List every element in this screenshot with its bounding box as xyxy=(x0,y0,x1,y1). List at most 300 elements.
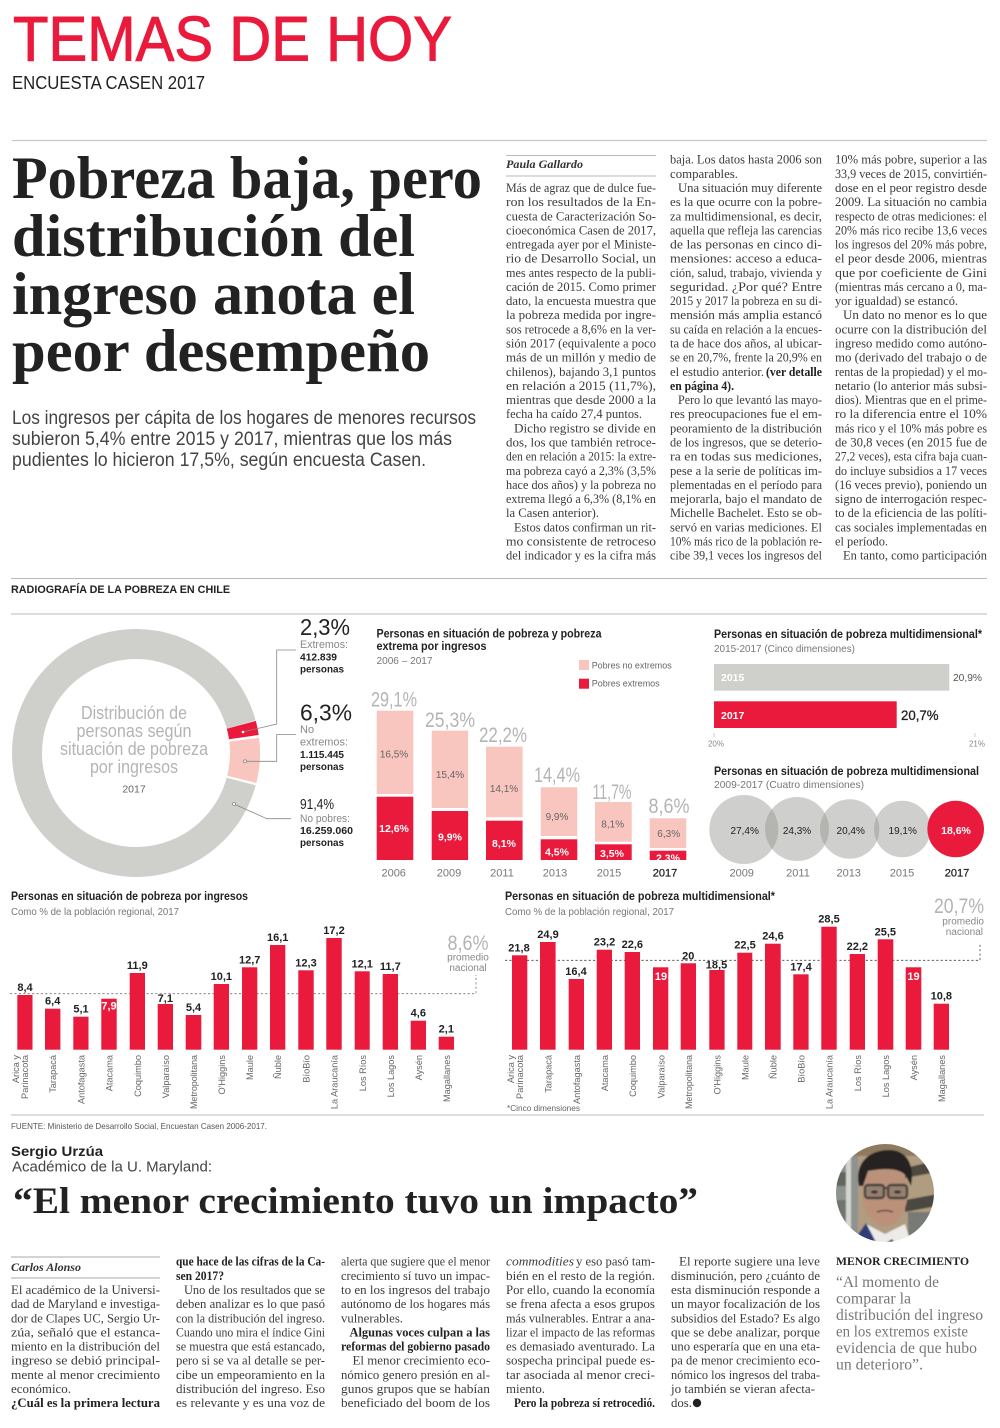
deck text xyxy=(12,408,476,471)
interview column 4: commodities xyxy=(506,1254,574,1269)
bar chart: regional income poverty: 12,7 xyxy=(239,954,260,966)
interview column 3: reformas del gobierno pasado xyxy=(341,1339,490,1354)
bubble chart 2009-2017: 2017 xyxy=(945,868,969,880)
callout: not poor: 91,4% xyxy=(300,797,334,813)
pull quote: en los extremos existe xyxy=(836,1324,968,1340)
headline: Pobreza baja, pero xyxy=(12,145,482,211)
bar 2006: 29,1% xyxy=(371,689,417,712)
bar 2011: 8,1% xyxy=(492,838,517,850)
bar chart: regional income poverty: Tarapacá xyxy=(48,1054,58,1093)
pull quote: comparar la xyxy=(836,1290,911,1308)
article column 3: que por coeficiente de Gini xyxy=(835,265,987,280)
interview column 3 xyxy=(341,1254,491,1410)
interview column 4: miento. xyxy=(506,1381,545,1396)
bar chart: regional multidimensional poverty: O'Higgins xyxy=(712,1055,722,1095)
section title: TEMAS DE HOY xyxy=(13,4,452,74)
bar chart: regional income poverty: Parinacota xyxy=(20,1054,30,1099)
bar 2017: 2017 xyxy=(653,868,677,880)
article column 3: dios). Mientras que en el prime- xyxy=(835,392,987,407)
article column 2: plementadas en el período para xyxy=(670,477,822,492)
bar 2013: 14,4% xyxy=(534,764,580,787)
interview column 1: ingreso se debió principal- xyxy=(11,1353,160,1368)
bar 2006: 2006 xyxy=(381,868,406,880)
article column 3: más rico y el 10% más pobre es xyxy=(835,420,987,435)
interview column 5: nómico los ingresos del traba- xyxy=(671,1367,820,1382)
bar 2006 xyxy=(371,689,417,880)
multidimensional poverty bars heading: Personas en situación de pobreza multidimensional* xyxy=(714,629,982,641)
national average label: income: promedio xyxy=(447,952,489,964)
article column 3: (mientras más cercano a 0, ma- xyxy=(835,279,987,294)
bar chart: regional income poverty: BíoBío xyxy=(302,1055,312,1083)
bubble chart 2009-2017: 2011 xyxy=(786,868,810,880)
article column 2: 2015 y 2017 la pobreza en su di- xyxy=(670,293,822,308)
callout: extreme poverty: Extremos: xyxy=(300,639,348,651)
interview column 1: dad de Maryland e investiga- xyxy=(11,1296,160,1311)
interview column 4: bién en el resto de la región. xyxy=(506,1268,655,1283)
interview column 1: mente al menor crecimiento xyxy=(11,1367,160,1382)
bar chart: regional income poverty: Magallanes xyxy=(442,1055,452,1102)
interview column 3: gunos grupos que se habían xyxy=(341,1381,491,1396)
interview column 1: El académico de la Universi- xyxy=(11,1282,160,1297)
article column 3: ocurre con la distribución del xyxy=(835,321,987,336)
interview column 2: es relevante y es una voz de xyxy=(176,1395,325,1410)
interview column 1: miento en la distribución del xyxy=(11,1339,160,1354)
article column 2: 10% más rico de la población re- xyxy=(670,534,822,548)
interview column 5: un mayor focalización de los xyxy=(671,1296,820,1311)
bubble chart 2009-2017: 24,3% xyxy=(783,826,811,837)
interview column 2 xyxy=(176,1254,325,1410)
bar 2017 xyxy=(645,795,691,880)
article column 3: dose en el peor registro desde xyxy=(835,180,987,195)
bar 2009 xyxy=(425,709,475,880)
byline: Paula Gallardo: Paula Gallardo xyxy=(506,159,583,171)
article column 1: sión 2017 (equivalente a poco xyxy=(506,336,656,350)
interview column 1: zúa, señaló que el estanca- xyxy=(11,1324,160,1339)
interview column 3: El menor crecimiento eco- xyxy=(352,1353,490,1368)
article column 1: extrema llegó a 6,3% (8,1% en xyxy=(506,491,656,506)
interview column 2: sen 2017? xyxy=(176,1268,224,1283)
article column 3: to de la eficiencia de las políti- xyxy=(835,505,987,520)
bar 2009: 2009 xyxy=(437,868,461,880)
bar chart: regional multidimensional poverty: 10,8 xyxy=(931,991,952,1003)
article column 3: En tanto, como participación xyxy=(843,548,987,563)
article column 1: ron los resultados de la En- xyxy=(506,194,656,209)
article column 1: Dicho registro se divide en xyxy=(514,420,657,435)
callout: extreme poverty: personas xyxy=(300,664,344,676)
bar chart: regional multidimensional poverty: Tarapacá xyxy=(544,1054,554,1093)
article column 2: aquella que refleja las carencias xyxy=(670,222,822,237)
deck text: subieron 5,4% entre 2015 y 2017, mientras que los más xyxy=(12,429,452,450)
article column 3: los ingresos del 20% más pobre, xyxy=(835,237,987,252)
bar chart: regional multidimensional poverty: Parinacota xyxy=(515,1054,525,1099)
bubble chart 2009-2017: 20,4% xyxy=(837,826,865,837)
bar chart: regional multidimensional poverty: 20 xyxy=(682,950,694,962)
interview column 5 xyxy=(670,1254,820,1410)
bar chart: regional income poverty: Arica y xyxy=(11,1055,21,1083)
bar chart: regional income poverty: 7,9 xyxy=(101,1000,117,1012)
interview column 1: económico. xyxy=(11,1381,71,1396)
stacked chart heading: extrema por ingresos xyxy=(376,641,486,653)
bar chart: regional multidimensional poverty: Atacama xyxy=(600,1054,610,1091)
article column 1: entregada ayer por el Ministe- xyxy=(506,237,656,252)
interview column 2: con la distribución del ingreso. xyxy=(176,1310,325,1325)
article column 2: servó en varias mediciones. El xyxy=(670,519,822,534)
donut centre label: Distribución de xyxy=(81,703,187,723)
article column 3: do incluye subsidios a 17 veces xyxy=(835,463,987,478)
stacked chart heading: 2006 – 2017 xyxy=(376,655,433,667)
article column 2: Michelle Bachelet. Esto se ob- xyxy=(670,505,822,520)
article column 1: den en relación a 2015: la extre- xyxy=(506,449,656,464)
deck text: pudientes lo hicieron 17,5%, según encuesta Casen. xyxy=(12,450,426,471)
article column 2: ra en todas sus mediciones, xyxy=(670,449,822,464)
bar chart: regional multidimensional poverty: BíoBío xyxy=(796,1055,806,1083)
infographic section heading: RADIOGRAFÍA DE LA POBREZA EN CHILE xyxy=(11,583,230,596)
bar chart: regional income poverty: Aysén xyxy=(414,1055,424,1080)
bar chart: regional income poverty: 12,1 xyxy=(351,958,373,970)
bar chart: regional multidimensional poverty: 24,6 xyxy=(762,931,784,943)
bar 2013: 2013 xyxy=(543,868,567,880)
article column 3: mo (derivado del trabajo o de xyxy=(835,350,987,365)
interview header: Académico de la U. Maryland: xyxy=(12,1160,212,1176)
interview column 4: Por ello, cuando la economía xyxy=(506,1282,655,1297)
interview column 5: jo también se vieran afecta- xyxy=(670,1381,815,1396)
bar chart: regional multidimensional poverty: Los Ríos xyxy=(853,1055,863,1091)
interview column 3: nómico genero presión en al- xyxy=(341,1367,490,1382)
four-dimension heading: Personas en situación de pobreza multidimensional xyxy=(714,766,979,778)
bar chart: regional multidimensional poverty: 22,6 xyxy=(622,939,643,951)
article column 1: chilenos), bajando 3,1 puntos xyxy=(506,364,656,379)
portrait photo xyxy=(836,1144,934,1242)
bar chart: regional income poverty: 17,2 xyxy=(323,925,345,937)
bar chart: regional income poverty: Valparaíso xyxy=(161,1055,171,1098)
article column 1: rio de Desarrollo Social, un xyxy=(506,251,657,266)
source note: FUENTE: Ministerio de Desarrollo Social, Encuestan Casen 2006-2017. xyxy=(11,1121,267,1131)
bar 2013: 9,9% xyxy=(546,812,569,823)
article column 1: hace dos años) y la pobreza no xyxy=(506,477,656,492)
regional multidimensional poverty heading xyxy=(505,891,775,918)
bar 2015 xyxy=(592,781,632,880)
interview column 5: pa de menor crecimiento eco- xyxy=(671,1353,820,1368)
article column 3: rentas de la propiedad) y el mo- xyxy=(835,364,987,379)
bar chart: regional income poverty: 11,7 xyxy=(380,961,401,973)
bar chart: regional income poverty: 4,6 xyxy=(411,1008,426,1020)
bar chart: regional multidimensional poverty: Antofagasta xyxy=(572,1054,582,1104)
bar chart: regional multidimensional poverty: 17,4 xyxy=(790,961,813,973)
regional multidimensional poverty heading: Como % de la población regional, 2017 xyxy=(505,906,674,918)
pull quote xyxy=(836,1256,983,1374)
interview column 5: que se debe analizar, porque xyxy=(671,1324,820,1339)
multidimensional poverty bars heading: 2015-2017 (Cinco dimensiones) xyxy=(714,643,855,655)
bar chart: regional multidimensional poverty: Aysén xyxy=(909,1055,919,1080)
callout: not poor: personas xyxy=(300,837,344,849)
bar 2015: 11,7% xyxy=(592,781,632,804)
horizontal bar chart 2015-2017 xyxy=(708,664,985,749)
article column 3: yor igualdad) se estancó. xyxy=(835,293,958,308)
interview column 2: que hace de las cifras de la Ca- xyxy=(176,1254,325,1269)
article column 2: se en 20,7%, frente la 20,9% en xyxy=(670,350,822,365)
interview column 3: to en los ingresos del trabajo xyxy=(341,1282,490,1297)
article column 1: Más de agraz que de dulce fue- xyxy=(506,180,656,195)
interview column 4: Pero la pobreza sí retrocedió. xyxy=(514,1395,655,1410)
bar chart: regional income poverty: 2,1 xyxy=(439,1024,454,1036)
article column 2: el estudio anterior. xyxy=(670,364,764,379)
callout: extreme poverty: 412.839 xyxy=(300,652,337,664)
interview header xyxy=(11,1143,212,1176)
bar chart: regional multidimensional poverty: Los Lagos xyxy=(881,1055,891,1097)
byline: Carlos Alonso: Carlos Alonso xyxy=(11,1262,81,1274)
article column 3: de 30,8 veces (en 2015 fue de xyxy=(835,434,987,450)
interview column 2: Uno de los resultados que se xyxy=(184,1282,325,1297)
interview column 2: distribución del ingreso. Eso xyxy=(176,1381,325,1396)
stacked chart legend xyxy=(579,660,672,690)
interview column 4: sospecha principal puede es- xyxy=(506,1353,655,1368)
bar chart: regional income poverty: La Araucanía xyxy=(330,1054,340,1109)
bar chart: regional income poverty: Maule xyxy=(245,1055,255,1080)
bar chart: regional income poverty: 12,3 xyxy=(295,957,317,969)
article column 1: Estos datos confirman un rit- xyxy=(514,519,656,534)
interview column 2: pero si se va al detalle se per- xyxy=(176,1353,325,1368)
article column 1 xyxy=(506,180,657,563)
bar chart: regional multidimensional poverty: 25,5 xyxy=(875,926,896,938)
donut chart: distribution of poverty xyxy=(27,644,266,862)
interview column 5: esta disminución responde a xyxy=(671,1282,820,1297)
bar chart: regional income poverty: 11,9 xyxy=(127,960,148,972)
article column 3: 20% más rico recibe 13,6 veces xyxy=(835,222,987,237)
bar chart: regional multidimensional poverty xyxy=(505,914,980,1109)
bar chart: regional income poverty: Antofagasta xyxy=(76,1054,86,1104)
article column 1: mientras que desde 2000 a la xyxy=(506,392,656,407)
article column 3: cas sociales implementadas en xyxy=(835,519,987,534)
interview column 3: beneficiado del boom de los xyxy=(341,1395,490,1410)
bar chart: regional income poverty: 16,1 xyxy=(267,932,288,944)
bar 2011 xyxy=(479,724,527,880)
article column 1: la Casen anterior). xyxy=(506,505,599,520)
callout: non-extreme poverty: personas xyxy=(300,761,344,773)
bar chart: regional income poverty: Metropolitana xyxy=(189,1054,199,1109)
regional income poverty heading: Personas en situación de pobreza por ingresos xyxy=(11,891,248,903)
horizontal bar chart 2015-2017: 2017 xyxy=(721,710,745,722)
donut centre label: 2017 xyxy=(122,784,146,796)
article column 2: peoramiento de la distribución xyxy=(670,420,822,435)
horizontal bar chart 2015-2017: 21% xyxy=(969,740,985,749)
bar chart: regional multidimensional poverty: 21,8 xyxy=(508,942,530,954)
article column 3: Un dato no menor es lo que xyxy=(843,307,987,322)
bar chart: regional multidimensional poverty: 19 xyxy=(655,971,667,983)
horizontal bar chart 2015-2017: 20,9% xyxy=(953,672,982,684)
bar 2011: 22,2% xyxy=(479,724,527,747)
interview column 1: ¿Cuál es la primera lectura xyxy=(11,1395,160,1410)
national average label: income xyxy=(447,932,489,974)
article column 2: seguridad. ¿Por qué? Entre xyxy=(670,279,822,294)
callout: not poor: 16.259.060 xyxy=(300,825,353,837)
interview column 3: crecimiento sí tuvo un impac- xyxy=(341,1268,490,1283)
bar chart: regional income poverty: Ñuble xyxy=(273,1055,283,1079)
bar chart: regional multidimensional poverty: Maule xyxy=(740,1055,750,1080)
article column 3: 2009. La situación no cambia xyxy=(835,194,987,209)
deck text: Los ingresos per cápita de los hogares de menores recursos xyxy=(12,408,476,429)
article column 2 xyxy=(670,152,822,563)
interview column 5: disminución, pero ¿cuánto de xyxy=(671,1268,820,1283)
article column 2: Pero lo que levantó las mayo- xyxy=(678,392,822,407)
horizontal bar chart 2015-2017: 20% xyxy=(708,740,724,749)
four-dimension heading xyxy=(714,766,979,791)
interview column 3: Algunas voces culpan a las xyxy=(350,1324,490,1339)
bar chart: regional income poverty: 10,1 xyxy=(211,971,232,983)
callout: non-extreme poverty: No xyxy=(300,724,314,736)
bar chart: regional multidimensional poverty: 22,5 xyxy=(734,940,756,952)
regional income poverty heading xyxy=(11,891,248,918)
bar chart: regional income poverty: 6,4 xyxy=(45,996,61,1008)
pull quote: MENOR CRECIMIENTO xyxy=(836,1256,969,1268)
article column 3: el período. xyxy=(835,534,888,548)
pull quote: distribución del ingreso xyxy=(836,1307,983,1324)
bar 2011: 14,1% xyxy=(490,784,518,795)
article column 3: netario (lo anterior más subsi- xyxy=(835,378,987,393)
donut centre label: por ingresos xyxy=(90,757,178,777)
interview column 2: Cuando uno mira el índice Gini xyxy=(176,1324,325,1339)
headline: distribución del xyxy=(12,203,415,269)
donut centre label: situación de pobreza xyxy=(60,739,209,759)
national average label: multidimensional xyxy=(934,895,984,938)
bubble chart 2009-2017: 18,6% xyxy=(941,825,972,837)
bubble chart 2009-2017: 19,1% xyxy=(889,826,917,837)
interview column 5: El reporte sugiere una leve xyxy=(679,1254,820,1269)
bar 2009: 15,4% xyxy=(436,770,464,781)
article column 1: cación de 2015. Como primer xyxy=(506,279,657,294)
article column 2: pese a la serie de políticas im- xyxy=(670,463,822,478)
article column 3: ingreso medido como autóno- xyxy=(835,336,987,350)
stacked chart heading xyxy=(376,629,602,667)
article column 3: ro la diferencia entre el 10% xyxy=(835,406,987,421)
interview column 3: autónomo de los hogares más xyxy=(341,1296,490,1311)
footnote: *Cinco dimensiones xyxy=(507,1103,580,1113)
national average label: income: nacional xyxy=(449,963,487,974)
national average label: income: 8,6% xyxy=(448,932,488,955)
donut centre label xyxy=(60,703,209,796)
bar chart: regional multidimensional poverty: 22,2 xyxy=(847,941,868,953)
four-dimension heading: 2009-2017 (Cuatro dimensiones) xyxy=(714,779,864,791)
bubble chart 2009-2017: 2013 xyxy=(836,868,861,880)
bar chart: regional multidimensional poverty: Valparaíso xyxy=(656,1055,666,1098)
multidimensional poverty bars heading xyxy=(714,629,982,655)
bar chart: regional multidimensional poverty: Metropolitana xyxy=(684,1054,694,1109)
article column 3: respecto de otras mediciones: el xyxy=(835,208,987,223)
callout: non-extreme poverty xyxy=(300,700,352,773)
interview column 4: es demasiado aventurado. La xyxy=(506,1339,655,1354)
article column 2: (ver detalle xyxy=(766,364,822,379)
headline: peor desempeño xyxy=(12,318,430,384)
interview column 1: dor de Clapes UC, Sergio Ur- xyxy=(11,1310,160,1325)
bar chart: regional income poverty: 8,4 xyxy=(17,982,34,994)
interview column 4: más vulnerables. Entrar a ana- xyxy=(506,1310,655,1325)
callout: non-extreme poverty: 1.115.445 xyxy=(300,749,344,761)
article column 1: cioeconómica Casen de 2017, xyxy=(506,222,656,237)
bar chart: regional income poverty: Atacama xyxy=(104,1054,114,1091)
bar chart: regional multidimensional poverty: 23,2 xyxy=(594,937,615,949)
bar 2006: 12,6% xyxy=(379,823,410,835)
bar chart: regional multidimensional poverty: Magallanes xyxy=(937,1055,947,1102)
bar chart: regional multidimensional poverty: 16,4 xyxy=(565,966,588,978)
article column 2: cibe 39,1 veces los ingresos del xyxy=(670,548,822,563)
bar 2013: 4,5% xyxy=(545,847,570,859)
interview column 2: cibe un empeoramiento en la xyxy=(176,1367,325,1382)
article column 2: mejorarla, bajo el mandato de xyxy=(670,491,822,506)
bar chart: regional multidimensional poverty: La Araucanía xyxy=(824,1054,834,1109)
article column 2: mensión más amplia estancó xyxy=(670,307,822,322)
article column 1: en relación a 2015 (11,7%), xyxy=(506,378,656,393)
interview column 4 xyxy=(506,1254,655,1410)
article column 3: 10% más pobre, superior a las xyxy=(835,152,987,167)
bar chart: regional multidimensional poverty: Arica y xyxy=(506,1055,516,1083)
bar 2015: 2015 xyxy=(597,868,621,880)
interview column 4: y eso pasó tam- xyxy=(576,1254,655,1269)
bar 2017: 2,3% xyxy=(656,852,681,864)
bubble chart 2009-2017: 27,4% xyxy=(731,826,759,837)
callout: extreme poverty: 2,3% xyxy=(300,614,350,640)
callout: extreme poverty xyxy=(300,614,350,676)
article column 3: 27,2 veces), esta cifra baja cuan- xyxy=(835,449,987,464)
callout: non-extreme poverty: extremos: xyxy=(300,737,348,749)
section subtitle: ENCUESTA CASEN 2017 xyxy=(12,73,205,93)
regional income poverty heading: Como % de la población regional, 2017 xyxy=(11,906,179,918)
interview column 2: se muestra que está estancado, xyxy=(176,1339,325,1354)
bar 2015: 3,5% xyxy=(600,848,625,860)
pull quote: evidencia de que hubo xyxy=(836,1340,977,1357)
article column 1: ma pobreza cayó a 2,3% (3,5% xyxy=(506,463,656,478)
article column 3: (16 veces previo), poniendo un xyxy=(835,477,987,492)
bar chart: regional income poverty: 5,4 xyxy=(186,1002,202,1014)
callout: not poor xyxy=(300,797,353,849)
bar chart: regional multidimensional poverty: 24,9 xyxy=(537,929,559,941)
bar chart: regional income poverty: Los Lagos xyxy=(386,1055,396,1097)
pull quote: un deterioro”. xyxy=(836,1356,923,1374)
interview column 4: lizar el impacto de las reformas xyxy=(506,1324,655,1339)
bar 2011: 2011 xyxy=(490,868,514,880)
article column 3 xyxy=(835,152,987,563)
interview column 4: tar asociada al menor creci- xyxy=(506,1367,655,1382)
bar chart: regional multidimensional poverty: 28,5 xyxy=(818,914,840,926)
masthead xyxy=(12,4,452,93)
national average label: multidimensional: promedio xyxy=(942,916,984,928)
bubble chart 2009-2017 xyxy=(709,795,984,880)
article column 1: la pobreza medida por ingre- xyxy=(506,307,656,322)
bar 2013 xyxy=(534,764,580,880)
bar 2017: 8,6% xyxy=(648,795,690,818)
interview column 5: dos. xyxy=(671,1395,692,1410)
bar chart: regional multidimensional poverty: Ñuble xyxy=(768,1055,778,1079)
article column 2: baja. Los datos hasta 2006 son xyxy=(670,152,822,167)
stacked chart legend: Pobres extremos xyxy=(592,679,660,690)
bar chart: regional multidimensional poverty: Coquimbo xyxy=(628,1055,638,1097)
article column 2: mensiones: acceso a educa- xyxy=(670,251,822,266)
article column 1: dato, la encuesta muestra que xyxy=(506,293,656,308)
article column 3: signo de interrogación respec- xyxy=(835,491,987,506)
article column 2: comparables. xyxy=(670,166,738,181)
callout: non-extreme poverty: 6,3% xyxy=(300,700,352,726)
interview column 4: se frena afecta a esos grupos xyxy=(506,1296,655,1311)
article column 1: cuesta de Caracterización So- xyxy=(506,208,656,223)
national average label: multidimensional: 20,7% xyxy=(934,895,984,918)
bar chart: regional income poverty: Coquimbo xyxy=(133,1055,143,1097)
article column 1: mo consistente de retroceso xyxy=(506,534,656,548)
headline: ingreso anota el xyxy=(12,261,415,327)
bar chart: regional income poverty: 7,1 xyxy=(158,993,173,1005)
stacked chart legend: Pobres no extremos xyxy=(592,661,672,672)
headline xyxy=(12,145,482,384)
horizontal bar chart 2015-2017: 2015 xyxy=(721,672,745,684)
interview headline: “El menor crecimiento tuvo un impacto” xyxy=(13,1181,698,1222)
bar chart: regional income poverty: Los Ríos xyxy=(358,1055,368,1091)
